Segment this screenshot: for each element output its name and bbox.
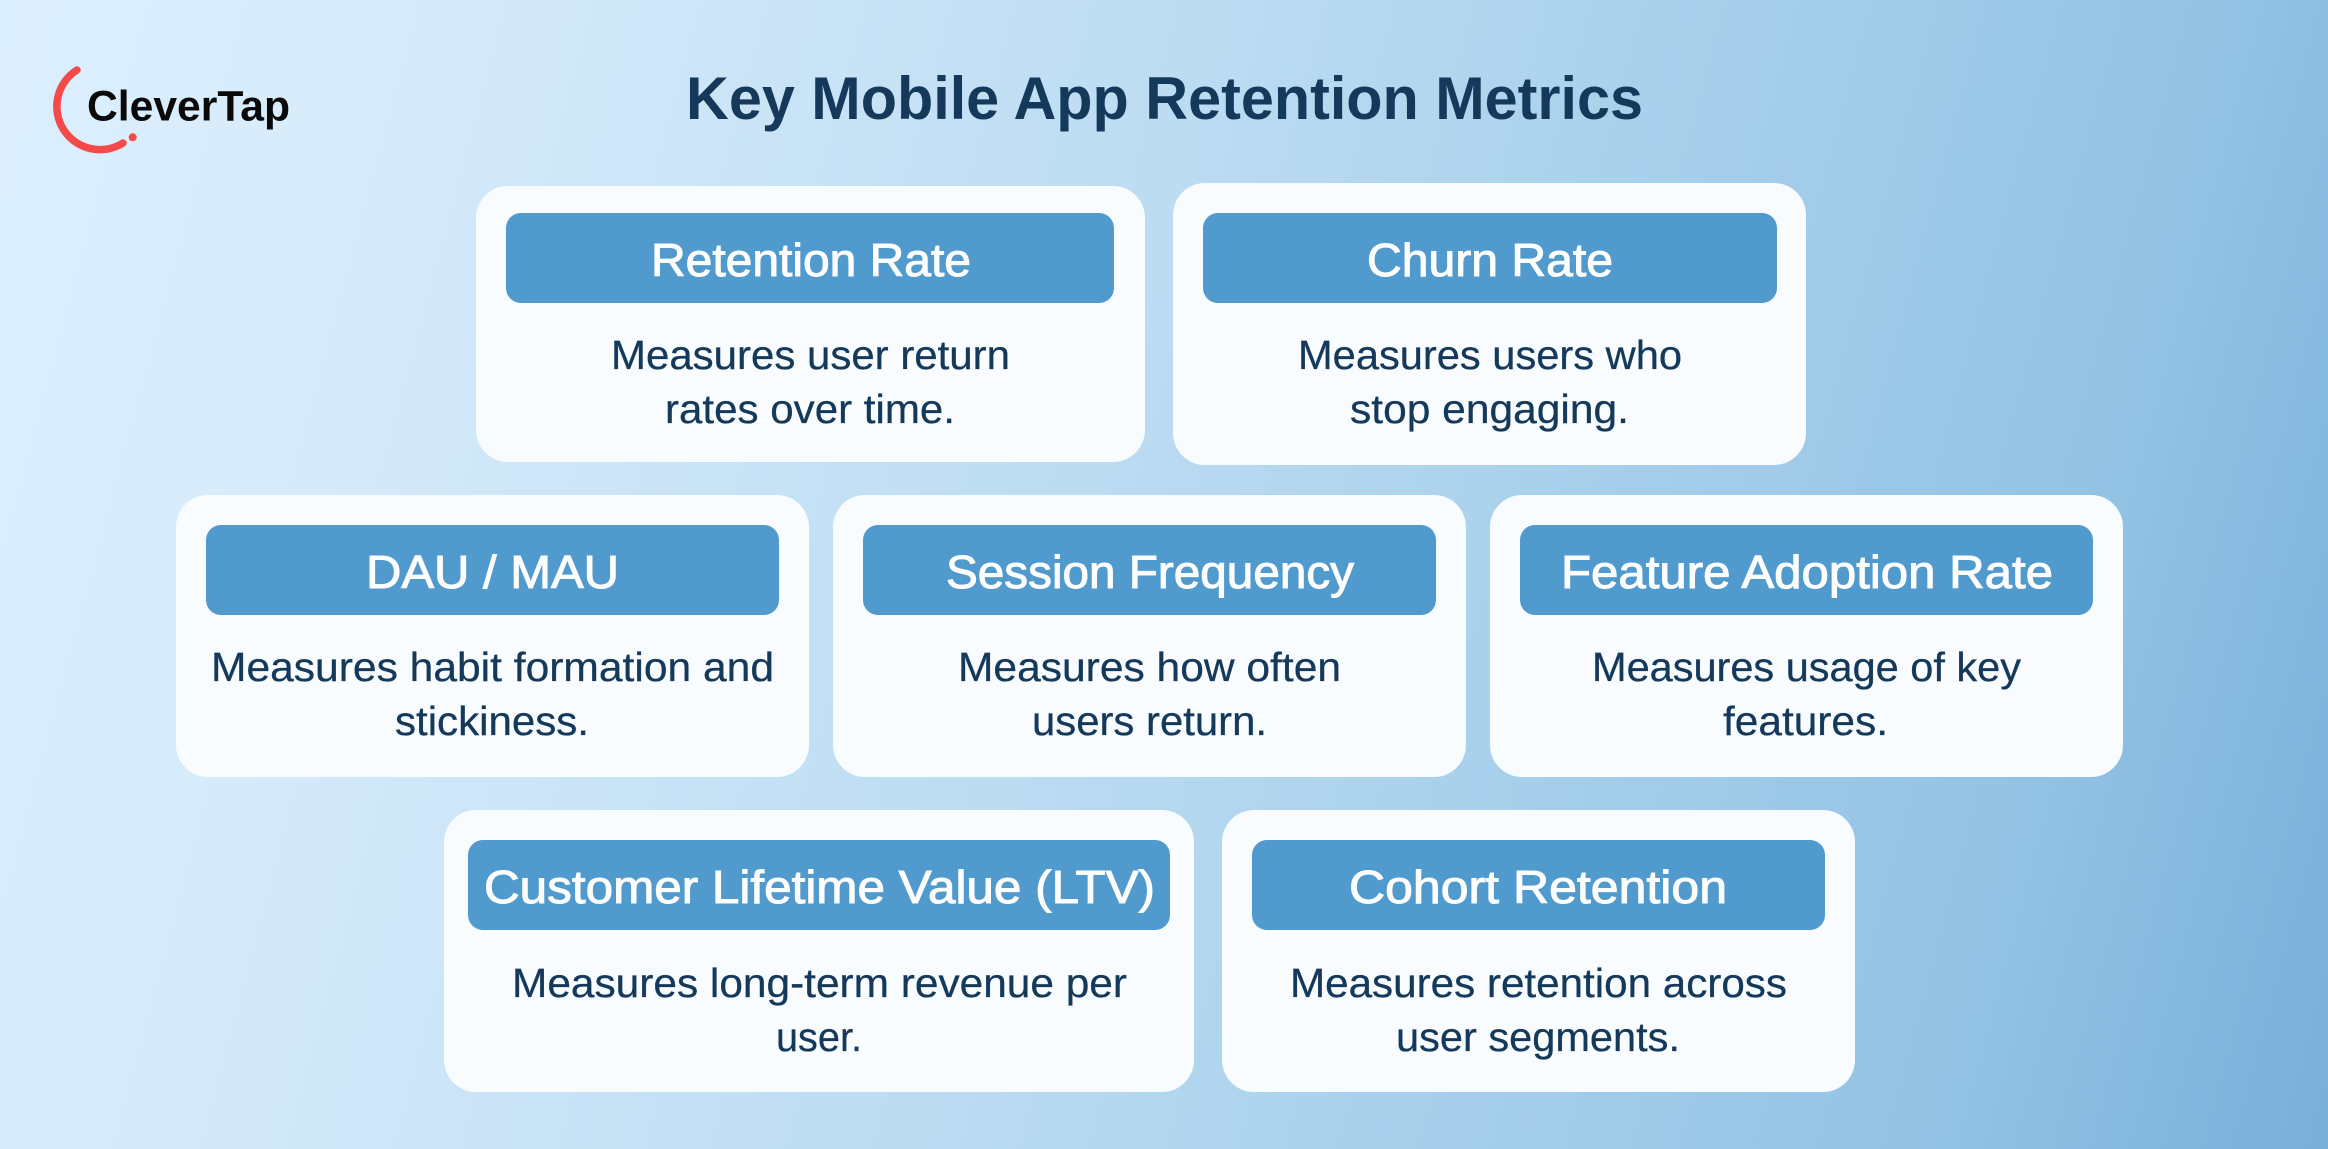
description: Customer Lifetime Value (LTV): Measures long-term revenue per — [512, 960, 1127, 1006]
header: Session Frequency: Session Frequency — [946, 546, 1354, 598]
description: Retention Rate — [611, 332, 1010, 432]
header: Churn Rate — [1203, 213, 1777, 303]
description: Retention Rate: Measures user return — [611, 332, 1010, 378]
description: Feature Adoption Rate: features. — [1723, 698, 1888, 744]
header: Customer Lifetime Value (LTV): Customer Lifetime Value (LTV) — [484, 861, 1155, 913]
description: DAU / MAU — [211, 644, 774, 744]
header: Feature Adoption Rate: Feature Adoption Rate — [1561, 546, 2053, 598]
header: Churn Rate: Churn Rate — [1367, 234, 1613, 286]
description: Feature Adoption Rate — [1592, 644, 2021, 744]
panel: Feature Adoption Rate — [1490, 495, 2123, 777]
header: Session Frequency — [863, 525, 1436, 615]
description: Feature Adoption Rate: Measures usage of key — [1592, 644, 2021, 690]
header: Retention Rate — [506, 213, 1114, 303]
panel: DAU / MAU — [176, 495, 809, 777]
logo: CleverTap — [57, 70, 290, 150]
logo wordmark: CleverTap — [87, 83, 290, 131]
header: Feature Adoption Rate — [1520, 525, 2093, 615]
description: Session Frequency — [958, 644, 1341, 744]
description: Churn Rate: Measures users who — [1298, 332, 1682, 378]
description: DAU / MAU: stickiness. — [395, 698, 589, 744]
header: Cohort Retention: Cohort Retention — [1349, 861, 1727, 913]
header: DAU / MAU: DAU / MAU — [366, 546, 619, 598]
description: Cohort Retention: user segments. — [1396, 1014, 1680, 1060]
title: Key Mobile App Retention Metrics — [686, 65, 1643, 132]
panel: Session Frequency — [833, 495, 1466, 777]
description: Session Frequency: users return. — [1032, 698, 1267, 744]
panel: Retention Rate — [476, 186, 1145, 462]
icon: logo dot — [129, 133, 137, 141]
description: Customer Lifetime Value (LTV) — [512, 960, 1127, 1060]
header: DAU / MAU — [206, 525, 779, 615]
description: Retention Rate: rates over time. — [665, 386, 955, 432]
header: Customer Lifetime Value (LTV) — [468, 840, 1170, 930]
description: Cohort Retention: Measures retention across — [1290, 960, 1787, 1006]
description: Session Frequency: Measures how often — [958, 644, 1341, 690]
description: Customer Lifetime Value (LTV): user. — [776, 1014, 862, 1060]
header: Retention Rate: Retention Rate — [651, 234, 971, 286]
description: Cohort Retention — [1290, 960, 1787, 1060]
panel: Churn Rate — [1173, 183, 1806, 465]
header: Cohort Retention — [1252, 840, 1825, 930]
panel: Customer Lifetime Value (LTV) — [444, 810, 1194, 1092]
icon: logo arc — [57, 70, 123, 150]
panel: Cohort Retention — [1222, 810, 1855, 1092]
description: Churn Rate — [1298, 332, 1682, 432]
description: Churn Rate: stop engaging. — [1350, 386, 1629, 432]
description: DAU / MAU: Measures habit formation and — [211, 644, 774, 690]
